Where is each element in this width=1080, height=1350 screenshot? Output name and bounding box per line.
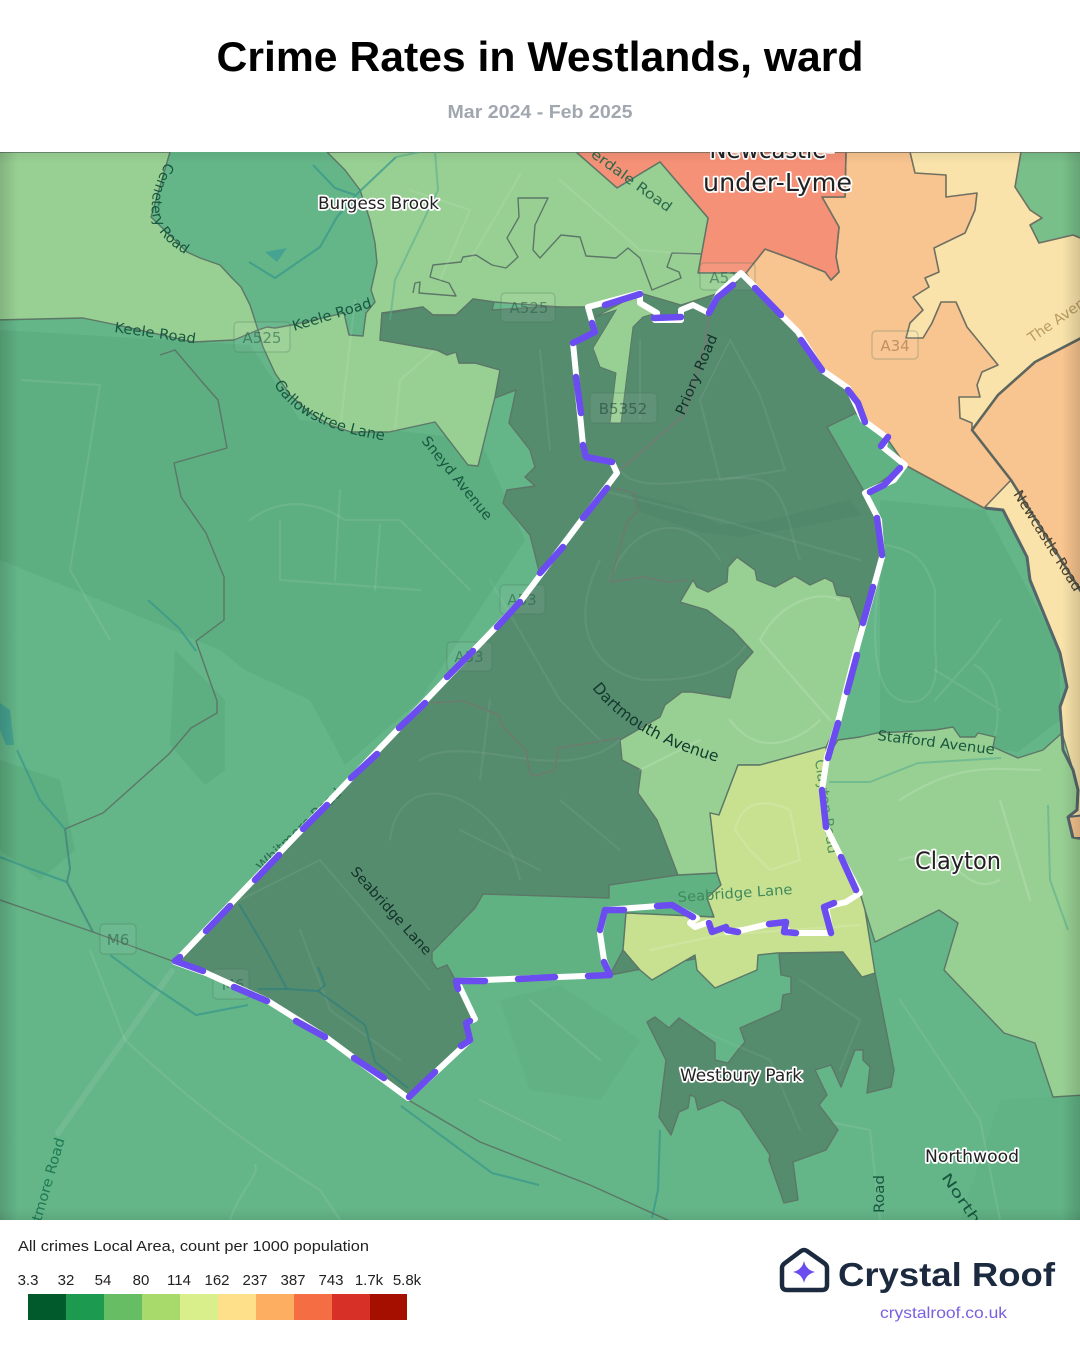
- legend tick labels: 387: [280, 1272, 306, 1289]
- zone: cream area east: [905, 152, 1080, 840]
- road shield: A53 lower: A53: [454, 648, 484, 666]
- road label: Seabridge Lane west: Seabridge Lane: [347, 864, 435, 959]
- boundary: thick line between green and cream: [985, 508, 1078, 838]
- road shield: B5352: B5352: [599, 400, 647, 418]
- boundary lines inside north zone: [413, 198, 702, 296]
- road label: Road south: Road: [872, 1175, 888, 1213]
- road shield: A53 upper: [500, 585, 545, 614]
- legend colour swatches: [28, 1294, 407, 1320]
- road shield: A525 west: A525: [243, 329, 281, 347]
- road shield: A525 north: [501, 293, 555, 322]
- map edge vignette: [0, 152, 1080, 1220]
- road label: Northwood Lane: North: [938, 1170, 983, 1227]
- legend: crime rate colour scale: [18, 1238, 422, 1320]
- legend tick labels: 54: [95, 1272, 111, 1289]
- road shield: A51: [700, 263, 755, 290]
- ward boundary: white line with purple dashes: [175, 273, 905, 1098]
- road shield: M6: M6: [107, 931, 129, 949]
- water: faint streams: [390, 152, 1068, 930]
- road label: Keele Road west: Keele Road: [113, 320, 197, 347]
- road: M6 lower stretch: [405, 1098, 672, 1222]
- zone: red high crime centre: [576, 152, 846, 280]
- zone: darker band inside ward: [630, 493, 862, 537]
- zone: light green north-west: [0, 152, 258, 342]
- roads: faint network light zones: [640, 596, 1040, 950]
- legend tick labels: 5.8k: [393, 1272, 422, 1289]
- zone: green area top right: [1015, 152, 1080, 243]
- legend tick labels: 237: [242, 1272, 268, 1289]
- road shield: M6 south: [213, 969, 249, 999]
- roads: faint network west and south: [22, 175, 1000, 1220]
- road shield: A34: [872, 331, 918, 359]
- boundary line south-west motorway: [0, 900, 175, 962]
- road label: Sneyd Avenue: Sneyd Avenue: [418, 433, 495, 524]
- icon: house with star: [782, 1250, 827, 1290]
- road shield: M6: [100, 924, 136, 954]
- zone: dark green Westlands ward area: [175, 273, 882, 1098]
- zone: small orange patch at right edge: [1068, 815, 1080, 838]
- place label: under-Lyme: under-Lyme: [703, 168, 852, 197]
- road shield: A525 north: A525: [510, 299, 548, 317]
- place label: Clayton: Clayton: [915, 847, 1001, 875]
- road shield: A525 west: [234, 322, 290, 352]
- road label: Clayton Road under ward line: Clayton Road: [811, 758, 840, 855]
- road label: Gallowstree Lane: Gallowstree Lane: [276, 380, 384, 440]
- water: ponds: [0, 248, 287, 745]
- zone: subtle darker land patches: [0, 330, 1080, 1220]
- road shield: B5352: [590, 393, 657, 423]
- road label: more Road: tmore Road: [29, 1136, 69, 1223]
- zone: light green Dartmouth Avenue area: [620, 557, 860, 875]
- water: main streams and pond outline: [0, 157, 660, 1218]
- boundary: grey footpath lines inside ward: [430, 488, 688, 776]
- place label: Newcastle: Newcastle-: [710, 135, 834, 164]
- zone: orange wedge east: [972, 336, 1080, 598]
- zone: yellow-green Seabridge area: [623, 747, 875, 988]
- zone: mid green south of ward: [432, 873, 721, 983]
- road label: Priory Road: Priory Road: [673, 332, 721, 418]
- road label: Keele Road east: Keele Road: [290, 296, 374, 335]
- road label: erdale Road: erdale Road: [588, 146, 675, 216]
- zone: dark green Westbury Park area: [647, 952, 894, 1203]
- legend tick labels: 114: [167, 1272, 191, 1289]
- place label: Westbury Park: Westbury Park: [680, 1066, 802, 1086]
- road: Priory Road grey track: [620, 315, 709, 470]
- zone: light green north: [258, 152, 741, 466]
- road shield: A51: A51: [709, 269, 739, 287]
- zone: light green Clayton: [822, 727, 1080, 1097]
- legend title: All crimes Local Area, count per 1000 population: [18, 1238, 369, 1255]
- title: Crime Rates in Westlands, ward: [216, 33, 864, 80]
- road label: Stafford Avenue: Stafford Avenue: [877, 728, 996, 758]
- road label: Cemetery Road: Cemetery Road: [151, 164, 190, 254]
- road shield: A53 lower: [447, 642, 492, 671]
- legend tick labels: 1.7k: [355, 1272, 384, 1289]
- place label: Northwood: Northwood: [925, 1147, 1019, 1167]
- legend tick labels: [18, 1272, 422, 1289]
- legend tick labels: 743: [318, 1272, 344, 1289]
- road label: Seabridge Lane east: Seabridge Lane: [677, 882, 793, 906]
- legend tick labels: 162: [204, 1272, 230, 1289]
- logo wordmark: Crystal Roof: [838, 1256, 1056, 1293]
- boundary lines western zones: [65, 350, 227, 829]
- road label: Dartmouth Avenue: Dartmouth Avenue: [593, 682, 718, 762]
- place label: Burgess Brook: Burgess Brook: [318, 194, 439, 214]
- legend tick labels: 80: [133, 1272, 149, 1289]
- legend tick labels: 32: [58, 1272, 74, 1289]
- zone: orange town centre: [746, 152, 1011, 508]
- logo: Crystal Roof: [782, 1250, 1056, 1322]
- legend tick labels: 3.3: [18, 1272, 38, 1289]
- road shield: A53 upper: A53: [507, 591, 537, 609]
- zone: light green notch north of ward: [593, 293, 657, 423]
- road shield: M6 south: M6: [222, 976, 244, 994]
- road label: Whitmore Road under ward line: Whitmore Road: [254, 786, 345, 875]
- roads: faint network inside ward: [240, 340, 860, 1130]
- zone: mid green patch north-east of ward: [856, 414, 901, 486]
- subtitle: date range: Mar 2024 - Feb 2025: [448, 102, 632, 122]
- road shield: A34: A34: [880, 337, 910, 355]
- website url: crystalroof.co.uk: [880, 1305, 1008, 1322]
